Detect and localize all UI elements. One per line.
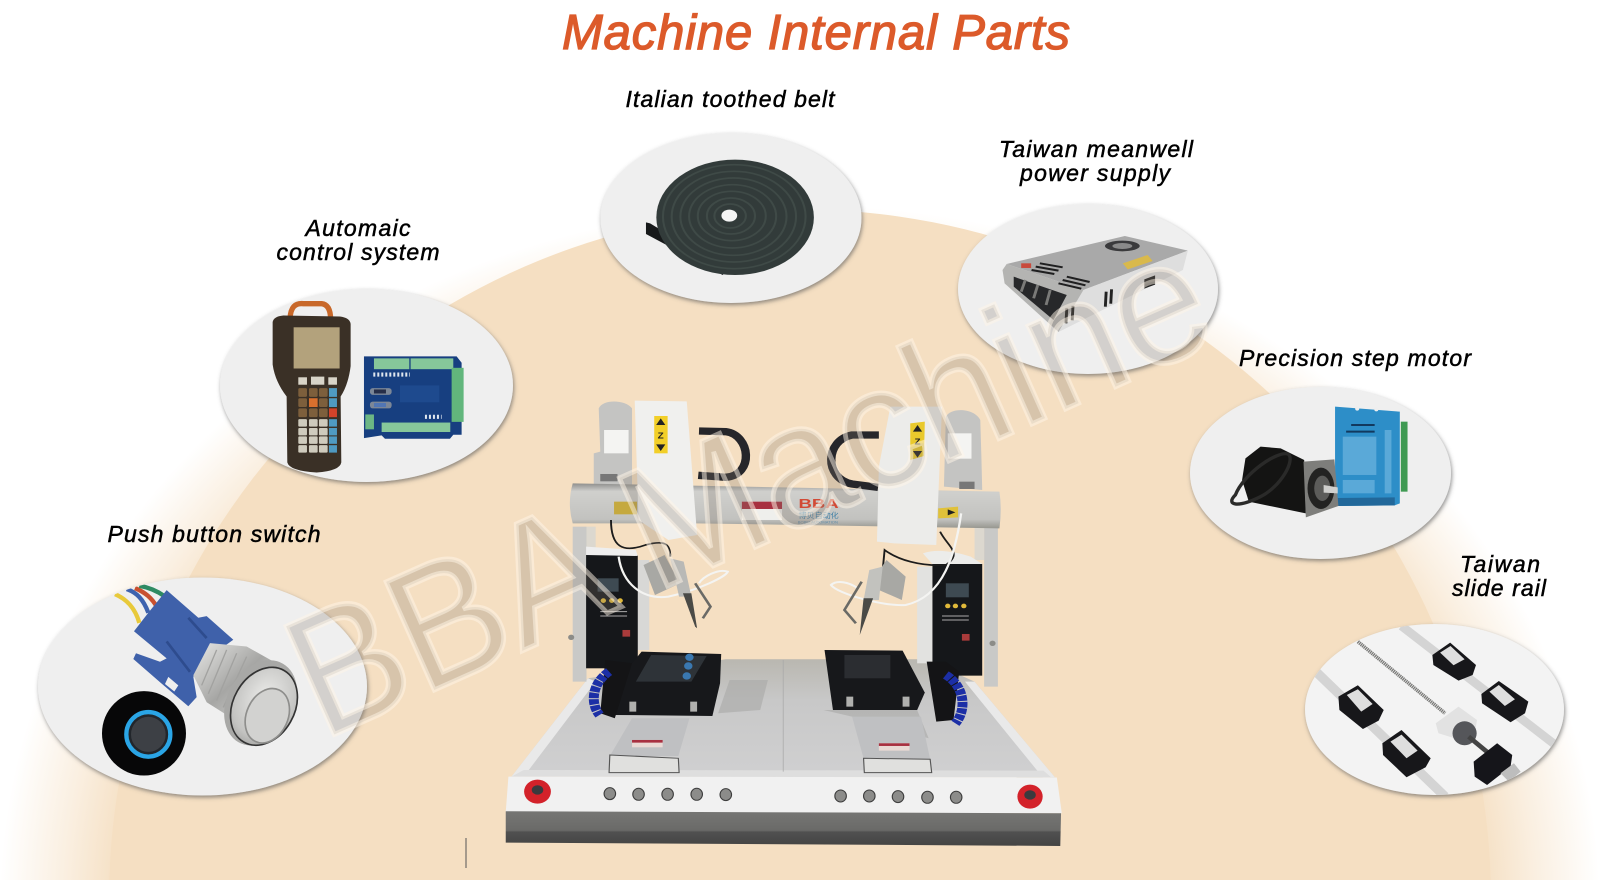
- icon: pendant handle: [290, 304, 331, 320]
- label: Automaic control system: control system: [276, 239, 440, 265]
- panel: power supply: [958, 204, 1218, 374]
- Z axis left: Z: [658, 431, 664, 440]
- right clamp and coolant hose: [927, 662, 963, 723]
- left slide plate: [609, 718, 689, 773]
- icon: black illuminated button: [102, 691, 186, 776]
- gantry beam: [570, 483, 1001, 528]
- label: Taiwan meanwell power supply: Taiwan meanwell: [999, 136, 1194, 162]
- icon: belt coil: [656, 160, 814, 275]
- rails: [1401, 626, 1558, 747]
- Z axis left: [635, 401, 697, 540]
- icon: ball screw nut: [1436, 707, 1477, 740]
- BBA logo: 博贝自动化: [799, 511, 839, 520]
- cable carrier left: [698, 431, 746, 477]
- icon: coloured wires: [115, 586, 164, 623]
- icon: servo drive: [1335, 407, 1400, 506]
- icon: motor body: [1242, 447, 1306, 513]
- left rear arch and carriage: [594, 401, 632, 487]
- icon: screw support block: [1474, 743, 1512, 785]
- label: Taiwan slide rail: slide rail: [1452, 575, 1547, 601]
- right fixture: [825, 650, 925, 710]
- Z axis right: [877, 407, 942, 545]
- soldering controller left: [586, 547, 638, 668]
- icon: linear blocks: [1338, 643, 1528, 777]
- warning sticker: [742, 502, 782, 520]
- icon: belt tail: [646, 222, 727, 275]
- panel: step motor: [1190, 387, 1451, 559]
- panel: automatic control system: [220, 289, 513, 482]
- label: Automaic control system: Automaic: [304, 215, 411, 241]
- left fixture: [615, 652, 721, 716]
- right slide plate: [852, 717, 932, 773]
- keypad: [298, 377, 337, 453]
- BBA logo: BOBEI AUTOMATION: [798, 521, 838, 524]
- label: Automaic control system: [276, 215, 440, 265]
- soldering head left: [611, 520, 728, 628]
- panel: slide rail: [1305, 624, 1564, 797]
- label: Taiwan meanwell power supply: power supply: [1019, 160, 1172, 186]
- icon: handheld pendant: [273, 315, 351, 473]
- icon: blue connector: [133, 590, 233, 706]
- title: Machine Internal Parts: [562, 6, 1070, 60]
- label: Taiwan meanwell power supply: [999, 136, 1194, 186]
- label: Taiwan slide rail: [1452, 551, 1547, 601]
- panel: toothed belt: [600, 133, 862, 303]
- cable carrier right: [831, 435, 879, 487]
- label: Precision step motor: Precision step motor: [1239, 345, 1472, 371]
- soldering controller right: [923, 551, 982, 676]
- label: Italian toothed belt: Italian toothed belt: [626, 86, 836, 112]
- gantry columns: [568, 527, 998, 687]
- label: Taiwan slide rail: Taiwan: [1460, 551, 1540, 577]
- front panel: [506, 777, 1062, 813]
- Z axis right: Z: [914, 437, 921, 446]
- icon: controller board: [364, 356, 464, 439]
- icon: metal threaded body: [193, 643, 272, 714]
- left clamp and coolant hose: [594, 660, 632, 718]
- label: Push button switch: Push button switch: [108, 521, 320, 547]
- table shadow: [718, 680, 929, 738]
- icon: power supply casing: [1007, 236, 1188, 290]
- panel buttons right: [835, 790, 962, 803]
- panel: push button switch: [38, 578, 367, 796]
- BBA logo: [798, 497, 839, 524]
- tick mark near base: [465, 838, 467, 868]
- panel buttons left: [604, 788, 732, 801]
- watermark: BBA Machine: [259, 198, 1237, 774]
- emergency stop left: [524, 780, 551, 804]
- emergency stop right: [1017, 785, 1043, 809]
- right rear arch and carriage: [944, 410, 982, 490]
- machine: soldering robot: [506, 401, 1062, 846]
- base plinth: [506, 811, 1061, 846]
- icon: metal button head: [224, 660, 297, 746]
- soldering head right: [831, 513, 961, 635]
- table top: [511, 659, 1055, 777]
- BBA logo: BBA: [799, 497, 839, 512]
